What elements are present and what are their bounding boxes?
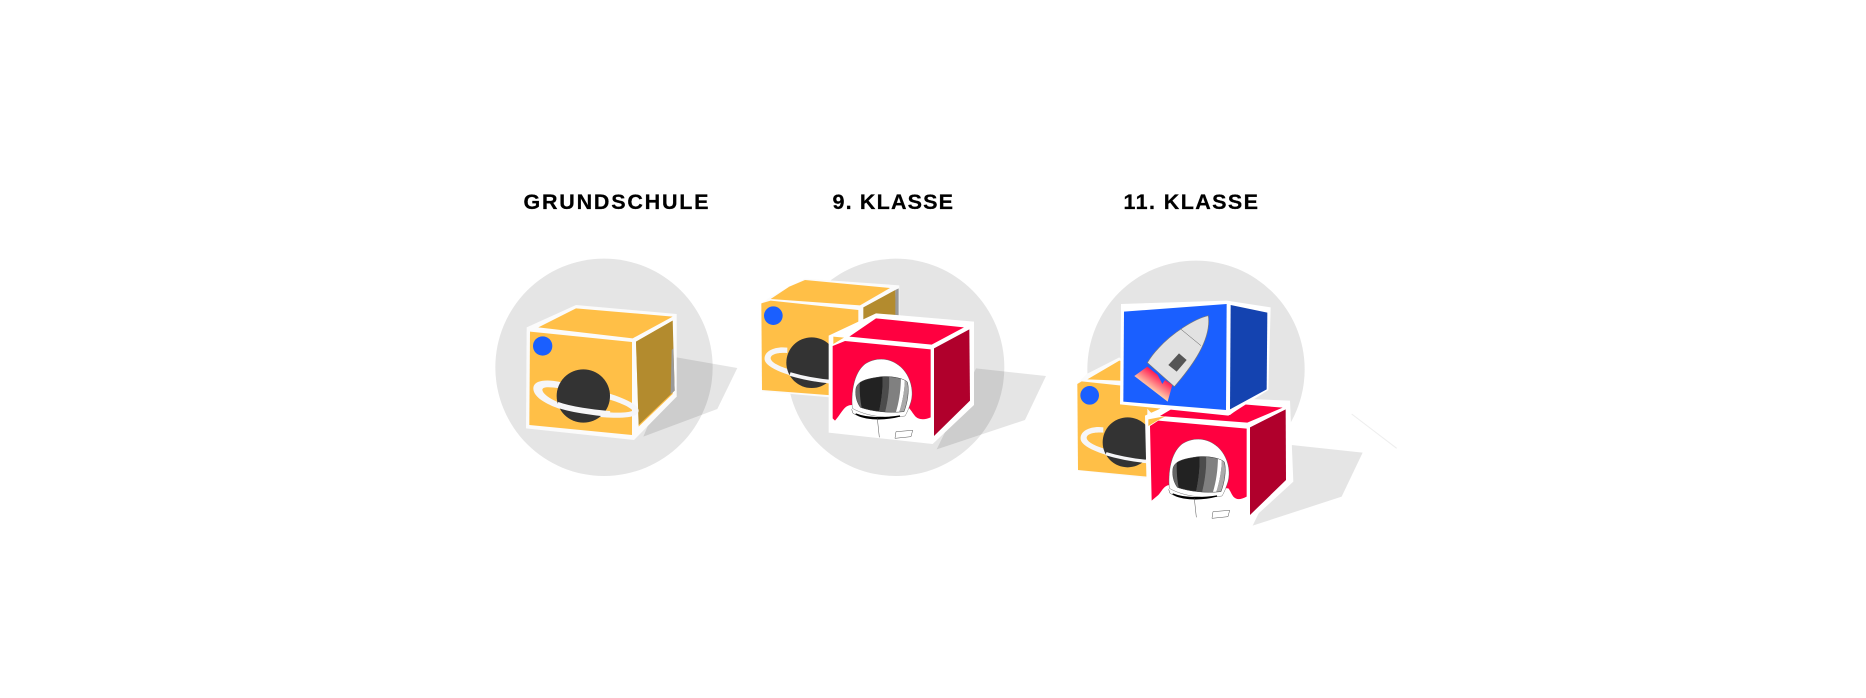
red cube front face (1150, 421, 1247, 501)
yellow cube outline (761, 279, 899, 400)
blue cube outline (1120, 301, 1271, 416)
cube top face (538, 308, 673, 338)
yellow sliver behind red cube (1148, 416, 1166, 426)
heading: Grundschule: GRUNDSCHULE (524, 190, 708, 214)
illustration: yellow planet cube (495, 259, 737, 476)
red cube side face (934, 329, 970, 436)
rocket flame (1134, 367, 1172, 402)
cube front face (529, 332, 632, 435)
rocket window (1168, 353, 1187, 372)
astronaut helmet (852, 359, 913, 438)
cube shadow (937, 368, 1046, 449)
astronaut helmet (1169, 439, 1230, 518)
panel: 9. Klasse (761, 190, 1046, 476)
blue dot (1080, 386, 1099, 405)
rocket (1134, 316, 1209, 402)
illustration: three cubes (1077, 261, 1397, 526)
yellow cube outline (1077, 357, 1173, 478)
illustration: two cubes (761, 259, 1046, 476)
panel: Grundschule (495, 190, 737, 476)
blue dot (533, 336, 552, 356)
heading: 9. Klasse: 9. KLASSE (832, 190, 953, 214)
grey backdrop circle (787, 259, 1004, 476)
cube outline (526, 305, 677, 440)
blue dot (764, 306, 783, 325)
rocket body (1147, 316, 1209, 387)
yellow cube top face (771, 280, 890, 305)
yellow cube side face (863, 290, 896, 343)
red cube front face (833, 341, 931, 421)
ringed planet (533, 369, 639, 423)
yellow cube front face (761, 301, 858, 397)
red cube outline (1145, 397, 1293, 521)
red cube side face (1250, 409, 1286, 515)
cube shadow (643, 357, 737, 437)
ringed planet (765, 337, 837, 388)
grey backdrop circle (495, 259, 713, 476)
yellow cube front face (1077, 381, 1147, 477)
yellow cube top face (1087, 361, 1173, 417)
red cube top face (849, 318, 964, 345)
cube side face (636, 321, 673, 427)
ringed planet (1081, 417, 1153, 467)
faint line (1352, 414, 1397, 448)
grey backdrop circle (1087, 261, 1305, 478)
red cube outline (829, 313, 974, 444)
blue cube front face (1123, 304, 1227, 410)
yellow sliver behind red cube (833, 337, 844, 344)
red cube top face (1160, 404, 1283, 423)
infographic canvas (495, 194, 1397, 526)
panel: 11. Klasse (1077, 190, 1397, 526)
cube shadow (1253, 445, 1363, 526)
blue cube side face (1230, 305, 1267, 409)
heading: 11. Klasse: 11. KLASSE (1124, 190, 1258, 214)
